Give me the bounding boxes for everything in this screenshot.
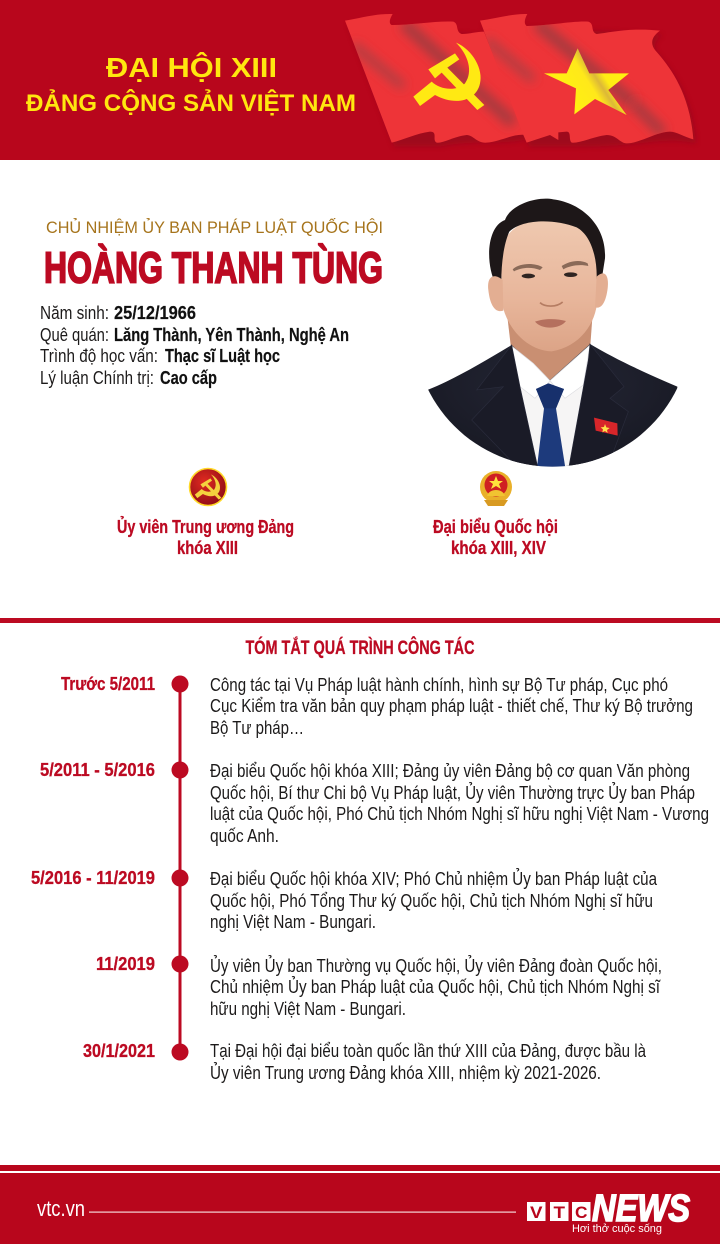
header banner bbox=[0, 0, 720, 160]
entry: 5/2016 - 11/2019 bbox=[31, 868, 658, 932]
icon: hammer and sickle bbox=[413, 43, 484, 110]
lapels bbox=[472, 344, 628, 470]
timeline axis bbox=[172, 676, 188, 1060]
tie bbox=[536, 383, 566, 470]
clothing bbox=[427, 344, 677, 477]
timeline bbox=[31, 674, 709, 1083]
suit bbox=[427, 344, 677, 477]
logo: VTC News: Hơi thở cuộc sống bbox=[572, 1223, 662, 1235]
entry: 5/2011 - 5/2016 bbox=[40, 760, 709, 846]
membership: national assembly bbox=[433, 471, 558, 558]
entry: 5/2016 - 11/2019: nghị Việt Nam - Bungari. bbox=[210, 912, 376, 932]
nose and mouth bbox=[535, 302, 566, 328]
membership: party central committee bbox=[117, 468, 294, 558]
logo: VTC News: NEWS bbox=[592, 1188, 690, 1230]
flags: party and national bbox=[345, 14, 696, 147]
entry: 30/1/2021: 30/1/2021 bbox=[83, 1041, 155, 1061]
entry: 11/2019 bbox=[96, 954, 662, 1019]
face bbox=[501, 218, 597, 351]
icon: party emblem bbox=[190, 468, 226, 506]
membership: party central committee: Ủy viên Trung ương Đảng bbox=[117, 516, 294, 537]
personal details: Năm sinh: bbox=[40, 303, 109, 323]
national flag bbox=[480, 14, 693, 143]
brows and eyes bbox=[513, 261, 588, 278]
entry: 30/1/2021: Tại Đại hội đại biểu toàn quốc lần thứ XIII của Đảng, được bầu là bbox=[210, 1041, 647, 1061]
entry: before 5/2011: Trước 5/2011 bbox=[61, 674, 155, 694]
icon: star bbox=[544, 48, 629, 115]
membership: national assembly: khóa XIII, XIV bbox=[451, 538, 546, 558]
entry: 5/2016 - 11/2019: 5/2016 - 11/2019 bbox=[31, 868, 155, 888]
personal details bbox=[40, 303, 349, 388]
logo: VTC News bbox=[527, 1188, 690, 1235]
personal details: Thạc sĩ Luật học bbox=[165, 346, 280, 366]
footer bbox=[0, 1165, 720, 1244]
title: ĐẠI HỘI XIII bbox=[106, 51, 277, 83]
entry: 30/1/2021: Ủy viên Trung ương Đảng khóa XIII, nhiệm kỳ 2021-2026. bbox=[210, 1062, 601, 1083]
section rule bbox=[0, 618, 720, 623]
membership: party central committee: khóa XIII bbox=[177, 538, 238, 558]
entry: 5/2016 - 11/2019: Quốc hội, Phó Tổng Thư ký Quốc hội, Chủ tịch Nhóm Nghị sĩ hữu bbox=[210, 891, 653, 911]
shirt bbox=[520, 354, 589, 467]
entry: 5/2011 - 5/2016: 5/2011 - 5/2016 bbox=[40, 760, 155, 780]
icon: national emblem bbox=[480, 471, 512, 506]
title: ĐẢNG CỘNG SẢN VIỆT NAM bbox=[26, 88, 356, 117]
role heading: CHỦ NHIỆM ỦY BAN PHÁP LUẬT QUỐC HỘI bbox=[46, 217, 383, 237]
section heading: TÓM TẮT QUÁ TRÌNH CÔNG TÁC bbox=[246, 637, 475, 659]
entry: before 5/2011 bbox=[61, 674, 693, 738]
site address: vtc.vn bbox=[37, 1196, 85, 1221]
logo: VTC News: V bbox=[530, 1203, 543, 1222]
logo: VTC News: T bbox=[554, 1203, 566, 1222]
entry: 11/2019: 11/2019 bbox=[96, 954, 155, 974]
ears bbox=[488, 276, 503, 311]
membership: national assembly: Đại biểu Quốc hội bbox=[433, 517, 558, 537]
name heading: HOÀNG THANH TÙNG bbox=[44, 242, 383, 292]
entry: before 5/2011: Bộ Tư pháp… bbox=[210, 718, 304, 738]
personal details: 25/12/1966 bbox=[114, 303, 196, 323]
party flag bbox=[345, 14, 525, 143]
hair bbox=[489, 199, 605, 285]
personal details: Cao cấp bbox=[160, 368, 217, 388]
personal details: Trình độ học vấn: bbox=[40, 346, 158, 366]
personal details: Quê quán: bbox=[40, 325, 109, 345]
pin bbox=[594, 418, 618, 436]
entry: 30/1/2021 bbox=[83, 1041, 647, 1083]
neck bbox=[507, 313, 593, 382]
entry: 11/2019: hữu nghị Việt Nam - Bungari. bbox=[210, 999, 406, 1019]
entry: 5/2011 - 5/2016: quốc Anh. bbox=[210, 826, 279, 846]
personal details: Lăng Thành, Yên Thành, Nghệ An bbox=[114, 325, 349, 345]
logo: VTC News: C bbox=[575, 1203, 588, 1222]
personal details: Lý luận Chính trị: bbox=[40, 368, 154, 388]
title bbox=[26, 51, 356, 117]
portrait bbox=[427, 199, 677, 477]
